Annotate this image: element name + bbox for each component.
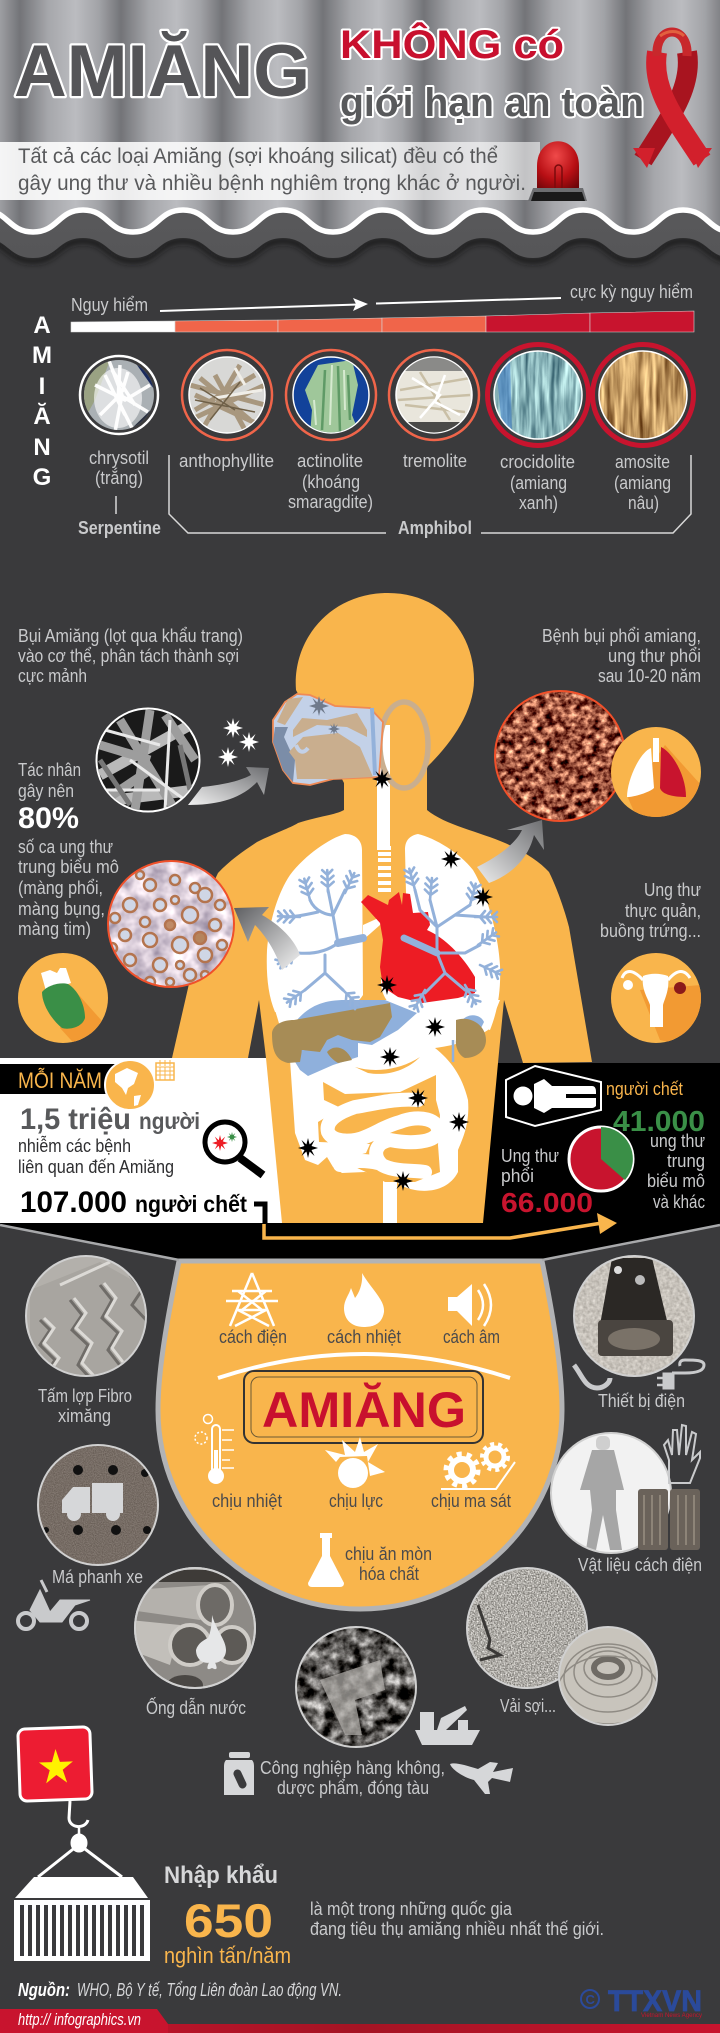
label: amosite: nâu) — [628, 493, 659, 513]
stat: imports 650 thousand tonnes: nghìn tấn/năm — [164, 1943, 291, 1968]
label: actinolite: smaragdite) — [288, 492, 373, 512]
title: AMIĂNG: AMIĂNG — [14, 31, 310, 112]
footer red bar with URL — [0, 2009, 720, 2033]
icon: airplane — [450, 1762, 513, 1794]
photo: electrical equipment — [574, 1256, 694, 1376]
source line: WHO, Bộ Y tế, Tổng Liên đoàn Lao động VN. — [77, 1980, 342, 2000]
icon: calendar — [156, 1060, 174, 1080]
bronchial tree right — [404, 867, 502, 1012]
stat: 107,000 deaths — [20, 1186, 247, 1219]
stat: 1.5 million people: nhiễm các bệnh — [18, 1135, 131, 1156]
icon: deceased person in hexagon — [506, 1066, 601, 1126]
photo: asbestos fibres micrograph — [96, 708, 200, 812]
text: 80 percent mesothelioma: màng tim) — [18, 919, 91, 939]
text: esophageal and ovarian cancer: Ung thư — [644, 880, 701, 900]
text: consumption note — [310, 1899, 604, 1939]
stat: deaths breakdown: biểu mô — [647, 1171, 705, 1191]
asbestos label box — [244, 1371, 483, 1443]
source line — [18, 1980, 342, 2000]
icon: magnifier — [205, 1122, 263, 1175]
icon: pill bottle — [224, 1752, 254, 1795]
text: 80 percent mesothelioma: trung biểu mô — [18, 857, 119, 877]
label: Amphibol group bracket: Amphibol — [398, 518, 472, 538]
label: crocidolite: (amiang — [510, 473, 567, 493]
lungs — [267, 834, 500, 1030]
arrowhead: connector — [597, 1213, 617, 1234]
stat: deaths breakdown: Ung thư — [501, 1146, 559, 1166]
label: cách điện: cách điện — [219, 1327, 287, 1347]
stat: deaths breakdown: 41.000 — [613, 1106, 705, 1138]
text: esophageal and ovarian cancer: thực quản, — [625, 901, 701, 921]
body silhouette — [172, 593, 592, 1223]
label: crocidolite: xanh) — [519, 493, 558, 513]
text: 80 percent mesothelioma: màng bụng, — [18, 899, 105, 919]
label: actinolite: actinolite — [297, 451, 363, 471]
label: chịu ăn mòn hóa chất: hóa chất — [359, 1564, 419, 1584]
vertical heading: AMIĂNG: I — [39, 373, 45, 400]
photo: diseased lung tissue — [495, 691, 625, 821]
photo: chrysotile — [80, 355, 160, 435]
icon: speaker — [448, 1284, 491, 1326]
label: cách âm: cách âm — [443, 1327, 500, 1347]
text: dust enters body — [18, 626, 243, 686]
stat: 107,000 deaths: người chết — [135, 1191, 247, 1217]
icon: flame — [344, 1273, 384, 1327]
icon: shipping container — [14, 1877, 150, 1961]
danger scale bar — [71, 311, 694, 332]
badge: uterus — [611, 953, 701, 1050]
stat: imports 650 thousand tonnes — [164, 1862, 291, 1968]
text: lung disease — [542, 626, 701, 686]
arrow: lung to tissue photo — [477, 820, 544, 883]
icon: ship — [415, 1706, 480, 1745]
stat: imports 650 thousand tonnes: 650 — [184, 1894, 273, 1947]
icon: force impact — [325, 1437, 385, 1488]
bronchial tree left — [275, 870, 363, 1010]
trachea — [377, 725, 391, 890]
text: lung disease: sau 10-20 năm — [598, 666, 701, 686]
label: amosite: amosite — [615, 452, 670, 472]
text: lung disease: Bệnh bụi phổi amiang, — [542, 626, 701, 646]
text: dust enters body: vào cơ thể, phân tách thành sợi — [18, 646, 239, 666]
central oval panel: properties — [158, 1261, 562, 1609]
vertical heading: AMIĂNG: N — [33, 434, 51, 461]
source line: Nguồn: — [18, 1980, 70, 2000]
photo: mesothelioma cells — [107, 861, 234, 987]
labels: chrysotile — [89, 448, 149, 488]
label: Serpentine group: Serpentine — [78, 518, 161, 538]
dust particles in body — [298, 769, 493, 1191]
label: actinolite: (khoáng — [302, 472, 360, 492]
band: annual stats left panel — [0, 1058, 290, 1224]
icon: red ribbon — [633, 32, 712, 168]
label: brake pads: Má phanh xe — [52, 1567, 143, 1587]
stat: deaths breakdown: phổi — [501, 1166, 534, 1186]
stat: deaths breakdown: ung thư — [650, 1131, 705, 1151]
mask over nose and mouth — [273, 694, 383, 785]
Vietnam flag — [18, 1727, 92, 1801]
icon: truck — [62, 1483, 123, 1521]
dust particles in mask — [309, 696, 340, 735]
icon: gears — [441, 1444, 515, 1489]
text: 80 percent mesothelioma: (màng phổi, — [18, 878, 103, 898]
stat: deaths breakdown: và khác — [653, 1192, 705, 1212]
label: insulation material: Vật liệu cách điện — [578, 1555, 702, 1575]
title: không có: KHÔNG có — [340, 21, 564, 67]
black transition band — [0, 1223, 720, 1260]
abdomen and intestines — [272, 1000, 500, 1223]
pie chart: cancer deaths — [569, 1127, 633, 1191]
label: chịu lực: chịu lực — [329, 1491, 383, 1511]
photo: actinolite — [286, 350, 376, 440]
connector arrow: deaths — [254, 1204, 602, 1238]
text: lung disease: ung thư phổi — [608, 646, 701, 666]
badge: lungs — [611, 727, 701, 817]
sparks: airborne dust — [218, 718, 259, 767]
label: crocidolite — [500, 452, 575, 513]
label: tremolite: tremolite — [403, 451, 467, 471]
photo: ship industry machinery — [296, 1627, 416, 1747]
icon: power tower — [226, 1273, 278, 1326]
heart — [361, 892, 475, 1003]
label: water pipes: Ống dẫn nước — [146, 1697, 246, 1718]
labels: chrysotile: (trắng) — [95, 467, 143, 488]
danger label: cực kỳ nguy hiểm: cực kỳ nguy hiểm — [570, 282, 693, 302]
text: dust enters body: cực mảnh — [18, 666, 87, 686]
label: chịu ăn mòn hóa chất: chịu ăn mòn — [345, 1544, 432, 1564]
stat: deaths breakdown: 66.000 — [501, 1187, 593, 1218]
text: esophageal and ovarian cancer — [600, 880, 701, 941]
intro text band: gây ung thư và nhiều bệnh nghiêm trọng khác ở người. — [18, 172, 526, 195]
photo: water pipes — [130, 1568, 255, 1695]
vertical heading: AMIĂNG — [32, 312, 52, 491]
label: chịu nhiệt: chịu nhiệt — [212, 1491, 282, 1511]
label: Serpentine group — [78, 496, 161, 538]
vertical heading: AMIĂNG: Ă — [33, 402, 51, 430]
label: aviation pharma shipbuilding: dược phẩm, đóng tàu — [277, 1778, 429, 1798]
photo: tremolite — [389, 350, 479, 440]
photo: asbestos fabric — [467, 1568, 587, 1688]
label: actinolite — [288, 451, 373, 512]
text: consumption note: là một trong những quốc gia — [310, 1899, 513, 1919]
text: 80 percent mesothelioma: gây nên — [18, 781, 74, 801]
logo: TTXVN: TTXVN — [608, 1985, 702, 2018]
label: aviation pharma shipbuilding — [260, 1758, 445, 1798]
icon: glove — [664, 1425, 700, 1483]
text: dust enters body: Bụi Amiăng (lọt qua khẩu trang) — [18, 626, 243, 646]
stat: deaths breakdown: người chết — [606, 1079, 683, 1099]
arrow: danger increasing — [160, 298, 561, 311]
photo: fibro cement roof — [26, 1256, 150, 1380]
header: corrugated metal banner — [0, 0, 720, 261]
stat: 107,000 deaths: 107.000 — [20, 1186, 127, 1219]
photo: brake pads — [38, 1445, 158, 1565]
text: 80 percent mesothelioma: Tác nhân — [18, 760, 81, 780]
label: crocidolite: crocidolite — [500, 452, 575, 472]
label: aviation pharma shipbuilding: Công nghiệp hàng không, — [260, 1758, 445, 1778]
danger label: nguy hiểm: Nguy hiểm — [71, 295, 148, 315]
icon: container crane hook — [38, 1801, 122, 1877]
icon: motorbike — [18, 1580, 90, 1629]
title: giới hạn an toàn: giới hạn an toàn — [340, 81, 644, 125]
photo: asbestos rope — [558, 1627, 658, 1725]
photo: crocidolite — [488, 344, 588, 446]
icon: flask — [308, 1533, 344, 1587]
icon: red siren — [528, 141, 587, 201]
label: fabric: Vải sợi... — [500, 1696, 556, 1716]
label: electrical equipment: Thiết bị điện — [598, 1391, 685, 1411]
stat: deaths breakdown — [501, 1079, 705, 1218]
label: chịu ma sát: chịu ma sát — [431, 1491, 511, 1511]
vertical heading: AMIĂNG: A — [33, 312, 51, 339]
label: chịu ăn mòn hóa chất — [345, 1544, 432, 1584]
intro text band — [0, 142, 540, 200]
edge lines from band — [0, 1225, 720, 1260]
band: annual stats right panel — [470, 1063, 720, 1225]
liver and kidneys — [272, 1000, 486, 1076]
arrow: to mask — [188, 767, 269, 805]
ear loop of mask — [380, 702, 428, 788]
text: 80 percent mesothelioma: số ca ung thư — [18, 837, 113, 857]
photo: amosite — [592, 344, 694, 446]
stat: 1.5 million people: 1,5 triệu — [20, 1103, 131, 1136]
stat: imports 650 thousand tonnes: Nhập khẩu — [164, 1862, 278, 1889]
intro text band: Tất cả các loại Amiăng (sợi khoáng silicat) đều có thể — [18, 145, 498, 168]
asbestos label box: AMIĂNG — [262, 1382, 466, 1438]
label: amosite: (amiang — [614, 473, 671, 493]
photo: insulation suit and gloves — [551, 1433, 700, 1553]
label: anthophyllite: anthophyllite — [179, 451, 274, 471]
icon: cable and plug — [574, 1360, 704, 1388]
arc over title — [218, 1354, 510, 1378]
logo: TTXVN: Vietnam News Agency — [641, 2013, 702, 2019]
stat: 1.5 million people — [18, 1103, 200, 1177]
text: 80 percent mesothelioma: 80% — [18, 802, 79, 835]
footer red bar with URL: http:// infographics.vn — [18, 2010, 141, 2029]
text: consumption note: đang tiêu thụ amiăng nhiều nhất thế giới. — [310, 1919, 604, 1939]
tab: mỗi năm — [0, 1064, 115, 1094]
vertical heading: AMIĂNG: G — [33, 464, 51, 491]
stat: 1.5 million people: liên quan đến Amiăng — [18, 1157, 174, 1177]
badge: heart — [18, 953, 110, 1050]
arrow: pleura to cell photo — [234, 907, 300, 970]
tab: mỗi năm: MỖI NĂM — [18, 1067, 102, 1093]
logo: TTXVN: C — [586, 1992, 596, 2007]
vertical heading: AMIĂNG: M — [32, 342, 52, 369]
icon: globe — [105, 1060, 155, 1110]
label: roof sheets — [38, 1386, 132, 1426]
label: roof sheets: Tấm lợp Fibro — [38, 1386, 132, 1406]
icon: thermometer — [195, 1414, 234, 1484]
label: amosite — [614, 452, 671, 513]
stat: 1.5 million people: người — [139, 1108, 200, 1134]
stat: deaths breakdown: trung — [667, 1151, 705, 1171]
labels: chrysotile: chrysotil — [89, 448, 149, 468]
label: roof sheets: ximăng — [58, 1406, 111, 1426]
photo: anthophyllite — [182, 350, 272, 440]
label: cách nhiệt: cách nhiệt — [327, 1327, 401, 1347]
label: Amphibol group bracket — [169, 455, 691, 538]
text: 80 percent mesothelioma — [18, 760, 119, 939]
text: esophageal and ovarian cancer: buồng trứng... — [600, 921, 701, 941]
